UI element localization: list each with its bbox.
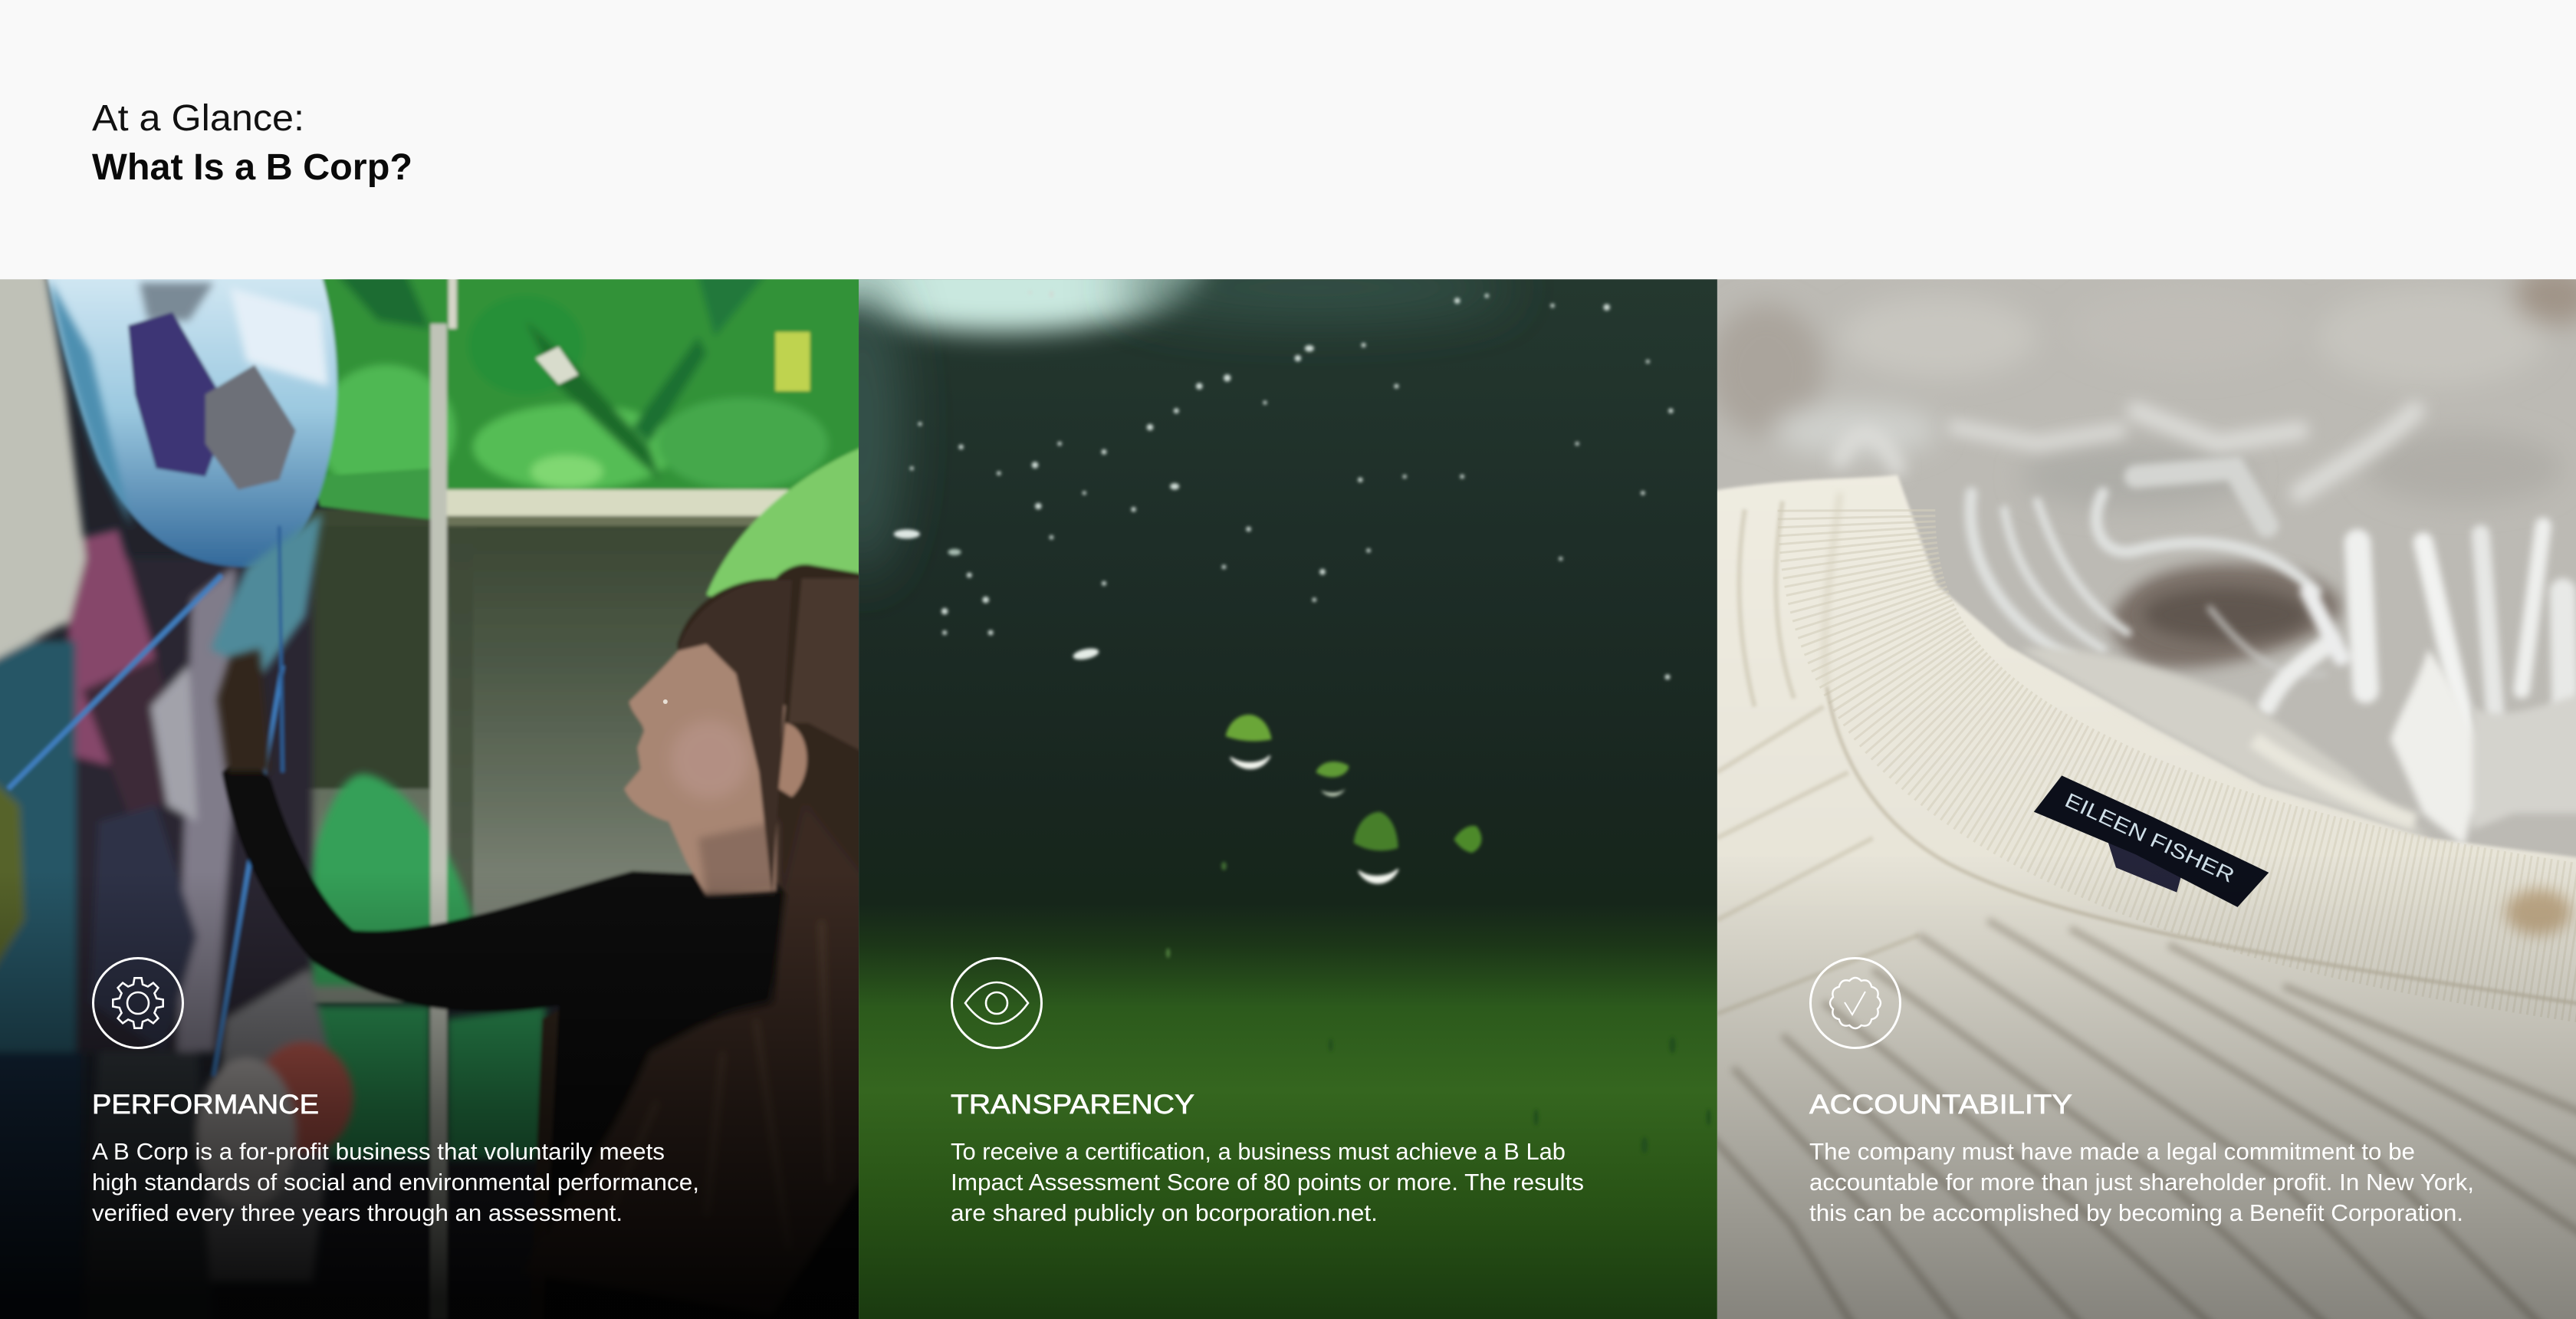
garment label xyxy=(2034,775,2269,907)
icon: gear xyxy=(94,959,182,1048)
body text: performance: verified every three years through an assessment. xyxy=(92,1199,623,1226)
panel: performance xyxy=(0,246,879,1319)
neck band ribs xyxy=(1856,509,2576,945)
dark hollow xyxy=(2111,564,2341,668)
shoulder ribs xyxy=(1717,502,1919,1014)
title: What Is a B Corp? xyxy=(92,147,412,188)
icon: eye xyxy=(952,959,1041,1048)
photo: woman sorting clothes xyxy=(0,246,879,1319)
panel: accountability xyxy=(1700,246,2576,1319)
woman xyxy=(536,562,859,1162)
heading: accountability: ACCOUNTABILITY xyxy=(1809,1090,2072,1120)
body text: accountability xyxy=(1809,1138,2474,1226)
body text: transparency: To receive a certification, a business must achieve a B Lab xyxy=(951,1138,1566,1165)
body text: performance xyxy=(92,1138,699,1226)
icon: seal with check xyxy=(1811,959,1900,1048)
heading: performance: PERFORMANCE xyxy=(92,1090,319,1120)
fraying knit tuft xyxy=(2254,649,2576,847)
green droplets xyxy=(1166,715,1482,958)
sweater body xyxy=(1700,475,2576,1319)
photo: water droplets on green glass xyxy=(859,279,1717,1319)
photo: cream sweater with frayed fringe xyxy=(1700,246,2576,1319)
body text: transparency: Impact Assessment Score of 80 points or more. The results xyxy=(951,1169,1584,1196)
body text: performance: high standards of social and environmental performance, xyxy=(92,1169,699,1196)
garment label: EILEEN FISHER xyxy=(2062,788,2238,887)
body text: performance: A B Corp is a for-profit business that voluntarily meets xyxy=(92,1138,665,1165)
panel: transparency xyxy=(859,279,1717,1319)
heading: transparency: TRANSPARENCY xyxy=(951,1090,1194,1120)
bottom shading xyxy=(0,871,859,1319)
body text: accountability: this can be accomplished by becoming a Benefit Corporation. xyxy=(1809,1199,2463,1226)
body text: transparency xyxy=(951,1138,1584,1226)
bottom shading xyxy=(1717,854,2576,1319)
sweater ribs xyxy=(1709,920,2576,1319)
left clothing rack xyxy=(0,246,353,1319)
body text: accountability: The company must have made a legal commitment to be xyxy=(1809,1138,2415,1165)
body text: transparency: are shared publicly on bcorporation.net. xyxy=(951,1199,1378,1226)
body text: accountability: accountable for more than just shareholder profit. In New York, xyxy=(1809,1169,2474,1196)
title: At a Glance: xyxy=(92,98,304,139)
title xyxy=(92,98,412,188)
